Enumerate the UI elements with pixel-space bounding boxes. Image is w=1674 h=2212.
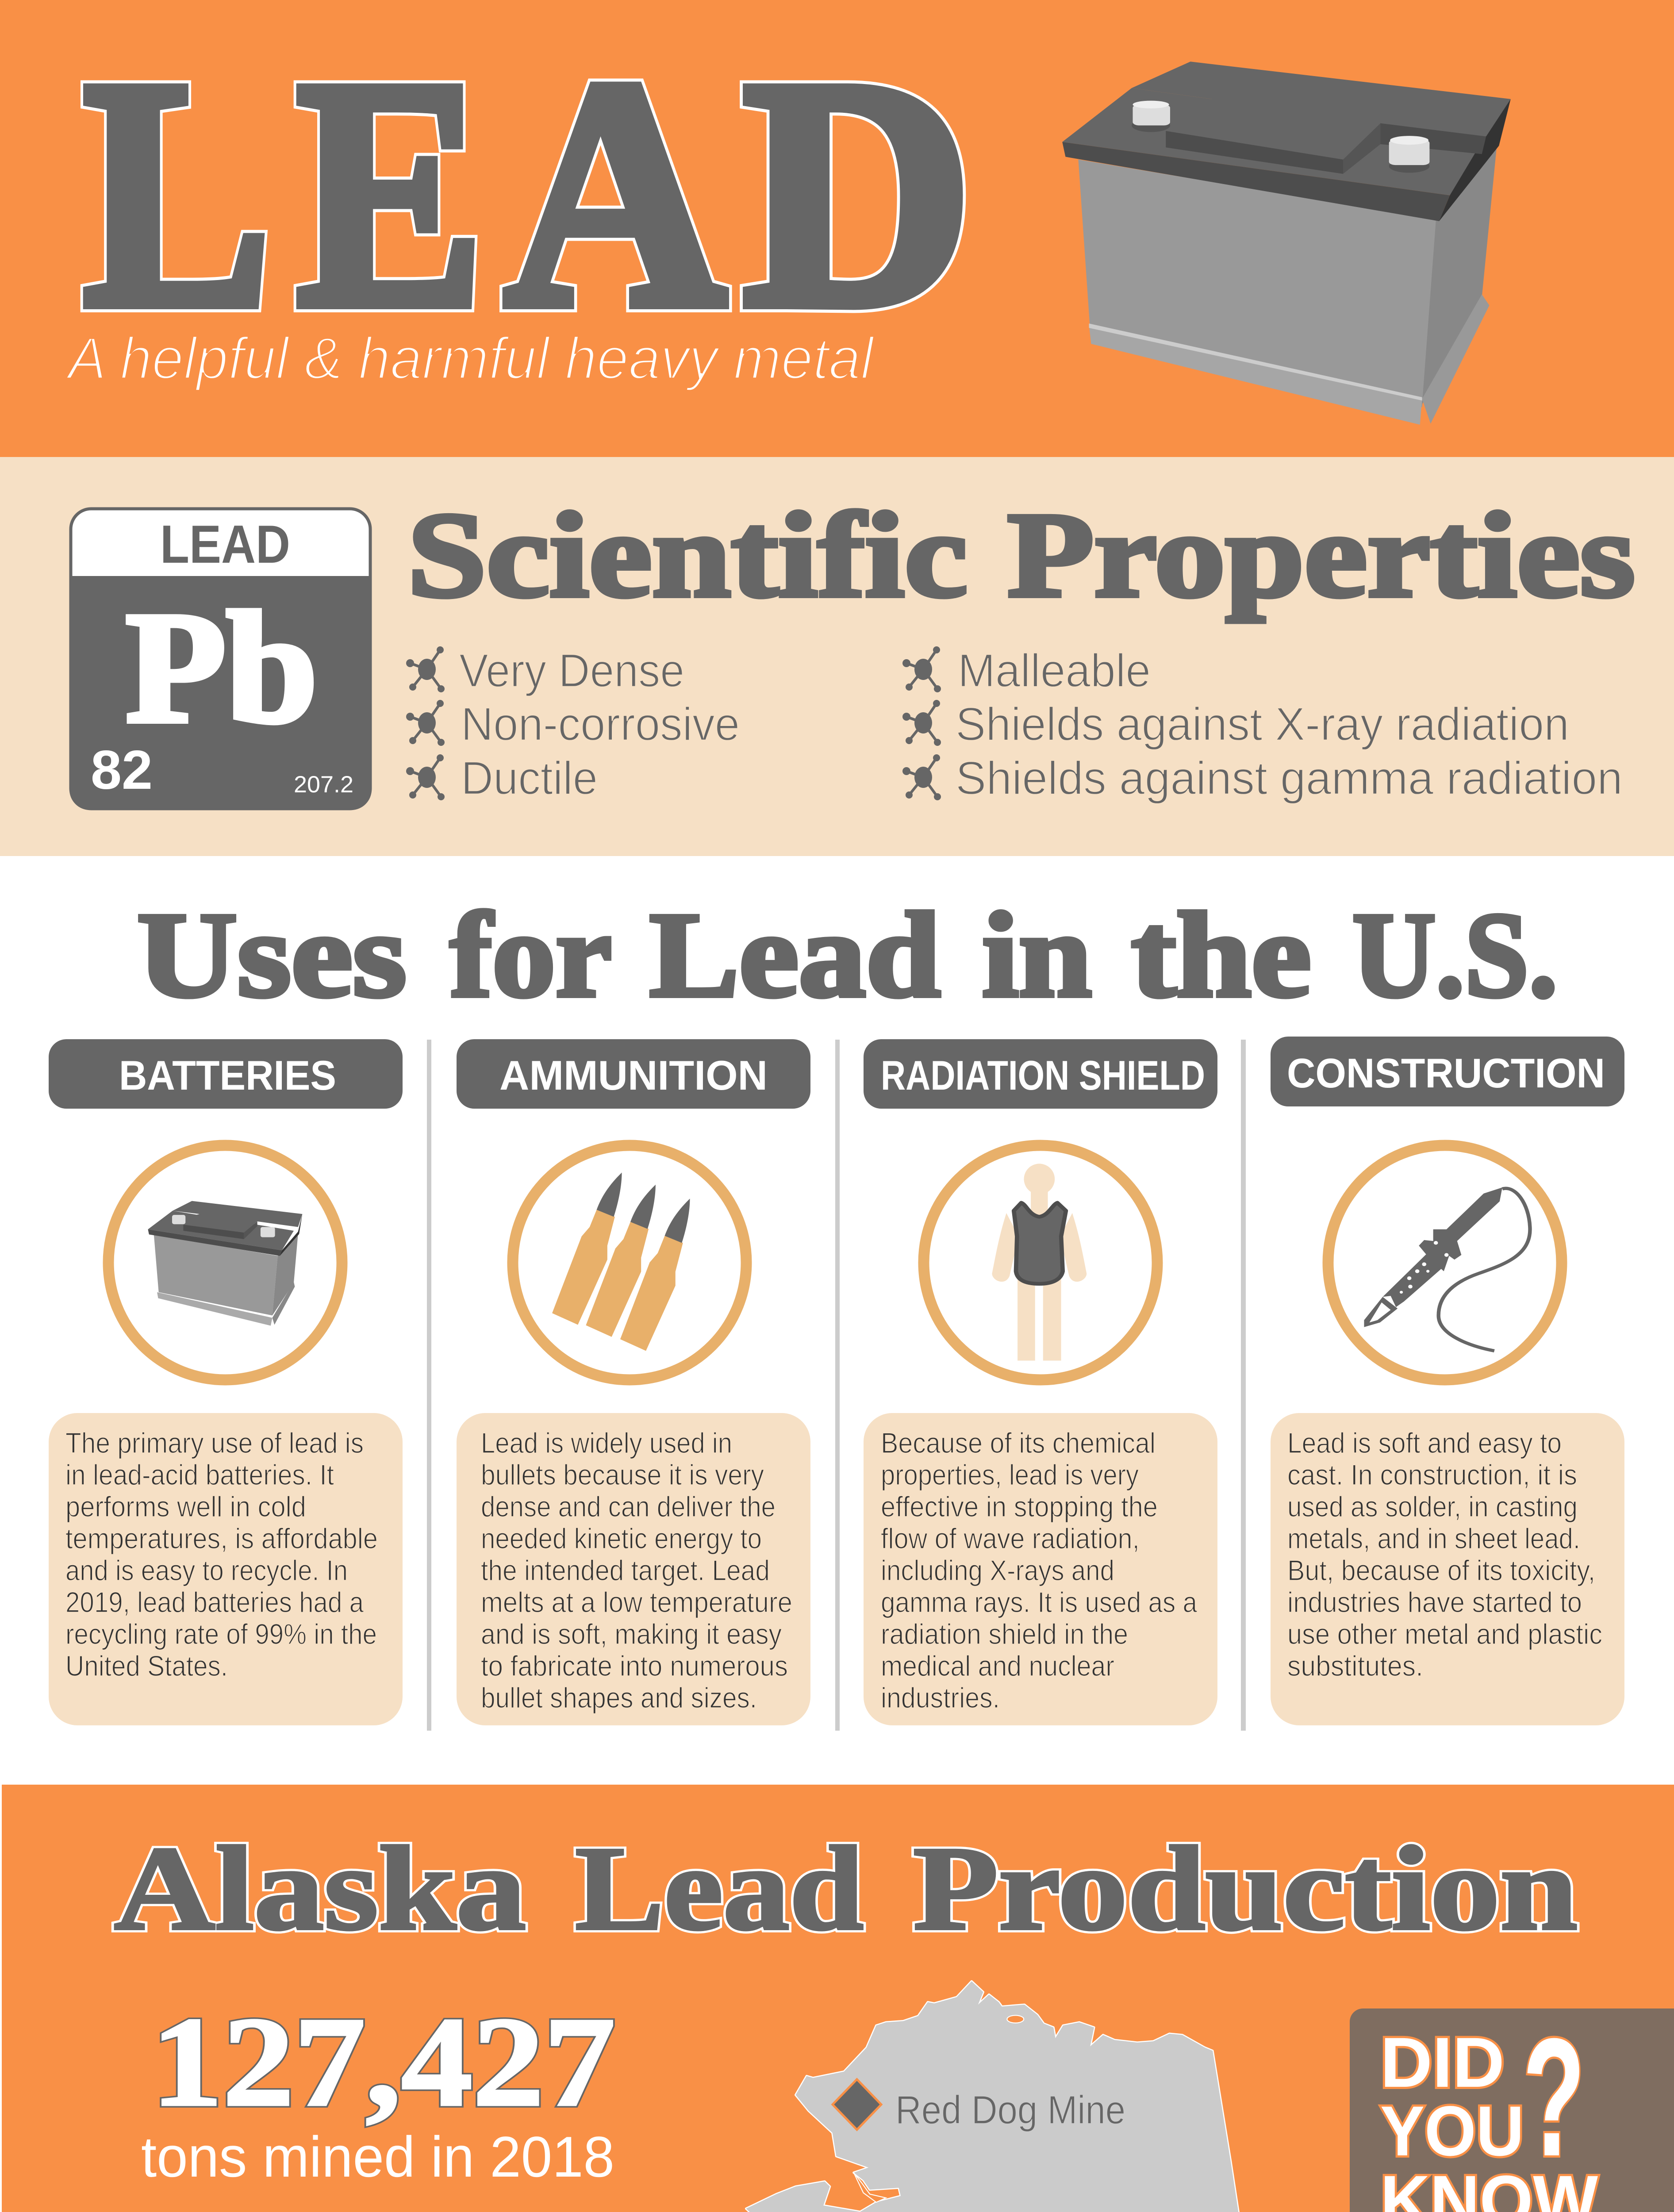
description bbox=[49, 1413, 403, 1725]
icon: battery in ring bbox=[108, 1145, 342, 1380]
description: medical and nuclear bbox=[881, 1650, 1114, 1682]
title: LEAD: D bbox=[743, 12, 973, 375]
description: used as solder, in casting bbox=[1287, 1490, 1578, 1523]
panel: ammunition bbox=[457, 1039, 810, 1725]
title: LEAD: D bbox=[743, 12, 973, 375]
title: LEAD: A bbox=[505, 12, 726, 375]
description: effective in stopping the bbox=[881, 1490, 1158, 1523]
property: Non-corrosive: Non-corrosive bbox=[461, 698, 740, 750]
callout: did you know: DID bbox=[1380, 2023, 1505, 2102]
property: Ductile: Ductile bbox=[461, 752, 598, 804]
description bbox=[864, 1413, 1217, 1725]
icon: person with lead vest in ring bbox=[924, 1145, 1157, 1380]
element tile: Pb: 207.2 bbox=[294, 772, 353, 798]
label: BATTERIES: BATTERIES bbox=[119, 1052, 336, 1098]
description bbox=[1271, 1413, 1624, 1725]
description: cast. In construction, it is bbox=[1287, 1459, 1577, 1491]
callout: did you know: ? bbox=[1523, 2003, 1585, 2191]
description bbox=[457, 1413, 810, 1725]
description: recycling rate of 99% in the bbox=[65, 1618, 377, 1650]
heading: Uses for Lead in the U.S.: in bbox=[982, 888, 1092, 1022]
stat: 127,427 tons: 127,427 bbox=[151, 1991, 615, 2133]
callout: did you know: YOU bbox=[1380, 2091, 1524, 2170]
title: LEAD: L bbox=[83, 12, 271, 375]
panel: scientific properties bbox=[0, 457, 1674, 856]
stat: 127,427 tons: 127,427 bbox=[151, 1991, 615, 2133]
description: radiation shield in the bbox=[881, 1618, 1128, 1650]
description: and is soft, making it easy bbox=[481, 1618, 782, 1650]
heading: Uses for Lead in the U.S.: U.S. bbox=[1352, 888, 1558, 1022]
heading: Alaska Lead Production: Production bbox=[913, 1822, 1578, 1955]
stat: 127,427 tons: tons mined in 2018 bbox=[141, 2124, 614, 2189]
description: Lead is soft and easy to bbox=[1287, 1427, 1562, 1459]
label: CONSTRUCTION bbox=[1271, 1037, 1624, 1106]
description: the intended target. Lead bbox=[481, 1554, 770, 1586]
description: melts at a low temperature bbox=[481, 1586, 792, 1618]
property: Malleable: Malleable bbox=[958, 645, 1151, 697]
label: RADIATION SHIELD bbox=[864, 1039, 1217, 1109]
icon: large battery bbox=[1062, 61, 1511, 425]
description: Because of its chemical bbox=[881, 1427, 1156, 1459]
description: But, because of its toxicity, bbox=[1287, 1554, 1595, 1586]
property: Shields against X-ray radiation: Shields against X-ray radiation bbox=[956, 698, 1569, 750]
heading: Alaska Lead Production: Lead bbox=[575, 1822, 864, 1955]
heading: Alaska Lead Production: Production bbox=[913, 1822, 1578, 1955]
description: use other metal and plastic bbox=[1287, 1618, 1602, 1650]
icon: bullets in ring bbox=[513, 1145, 746, 1380]
description: properties, lead is very bbox=[881, 1459, 1139, 1491]
description: in lead-acid batteries. It bbox=[65, 1459, 334, 1491]
label: AMMUNITION: AMMUNITION bbox=[499, 1052, 768, 1098]
title: LEAD: E bbox=[296, 12, 484, 375]
heading: Uses for Lead in the U.S.: Uses bbox=[137, 888, 407, 1022]
title: LEAD: L bbox=[83, 12, 271, 375]
heading: Uses for Lead in the U.S. bbox=[137, 888, 1558, 1022]
element tile: Pb: LEAD bbox=[160, 514, 290, 574]
marker: Red Dog Mine bbox=[833, 2079, 1125, 2132]
map: Alaska bbox=[123, 1982, 1586, 2212]
heading: Scientific Properties: Properties bbox=[1007, 488, 1635, 622]
heading: Uses for Lead in the U.S.: the bbox=[1131, 888, 1311, 1022]
description: needed kinetic energy to bbox=[481, 1522, 762, 1555]
description: Lead is widely used in bbox=[481, 1427, 732, 1459]
description: industries. bbox=[881, 1682, 1000, 1714]
panel: batteries bbox=[49, 1039, 403, 1725]
label: AMMUNITION bbox=[457, 1039, 810, 1109]
title: LEAD: E bbox=[296, 12, 484, 375]
description: including X-rays and bbox=[881, 1554, 1114, 1586]
element tile: Pb bbox=[69, 509, 372, 810]
description: flow of wave radiation, bbox=[881, 1522, 1140, 1555]
icon: soldering iron in ring bbox=[1328, 1145, 1562, 1380]
description: The primary use of lead is bbox=[65, 1427, 364, 1459]
label: RADIATION SHIELD: RADIATION SHIELD bbox=[881, 1052, 1205, 1098]
title: LEAD: A bbox=[505, 12, 726, 375]
subtitle: A helpful & harmful heavy metal bbox=[65, 326, 875, 392]
heading: Alaska Lead Production: Alaska bbox=[114, 1822, 526, 1955]
title: LEAD bbox=[83, 12, 973, 375]
description: and is easy to recycle. In bbox=[65, 1554, 348, 1586]
element tile: Pb: 82 bbox=[91, 740, 153, 801]
label: CONSTRUCTION: CONSTRUCTION bbox=[1287, 1050, 1605, 1096]
element tile: Pb: Pb bbox=[126, 579, 318, 756]
panel: construction bbox=[1271, 1037, 1624, 1725]
label: BATTERIES bbox=[49, 1039, 403, 1109]
heading: Uses for Lead in the U.S.: for bbox=[450, 888, 612, 1022]
description: dense and can deliver the bbox=[481, 1490, 776, 1523]
description: gamma rays. It is used as a bbox=[881, 1586, 1198, 1618]
heading: Alaska Lead Production: Lead bbox=[575, 1822, 864, 1955]
property: Very Dense: Very Dense bbox=[459, 645, 684, 697]
heading: Uses for Lead in the U.S.: Lead bbox=[649, 888, 941, 1022]
stat: 127,427 tons bbox=[141, 1991, 615, 2189]
panel: header bbox=[0, 0, 1674, 457]
heading: Alaska Lead Production bbox=[114, 1822, 1578, 1955]
description: temperatures, is affordable bbox=[65, 1522, 378, 1555]
property: Shields against gamma radiation: Shields against gamma radiation bbox=[956, 752, 1623, 804]
panel: Alaska lead production bbox=[2, 1785, 1674, 2212]
description: United States. bbox=[65, 1650, 228, 1682]
description: performs well in cold bbox=[65, 1490, 306, 1523]
description: to fabricate into numerous bbox=[481, 1650, 788, 1682]
panel: radiation shield bbox=[864, 1039, 1217, 1725]
marker: Red Dog Mine: Red Dog Mine bbox=[895, 2088, 1125, 2132]
description: industries have started to bbox=[1287, 1586, 1582, 1618]
description: bullet shapes and sizes. bbox=[481, 1682, 757, 1714]
callout: did you know bbox=[1350, 2003, 1674, 2212]
heading: Scientific Properties: Scientific bbox=[407, 488, 968, 622]
description: substitutes. bbox=[1287, 1650, 1423, 1682]
heading: Alaska Lead Production: Alaska bbox=[114, 1822, 526, 1955]
description: bullets because it is very bbox=[481, 1459, 764, 1491]
description: 2019, lead batteries had a bbox=[65, 1586, 364, 1618]
heading: Scientific Properties bbox=[407, 488, 1635, 622]
property: Ductile bbox=[406, 752, 598, 804]
description: metals, and in sheet lead. bbox=[1287, 1522, 1580, 1555]
